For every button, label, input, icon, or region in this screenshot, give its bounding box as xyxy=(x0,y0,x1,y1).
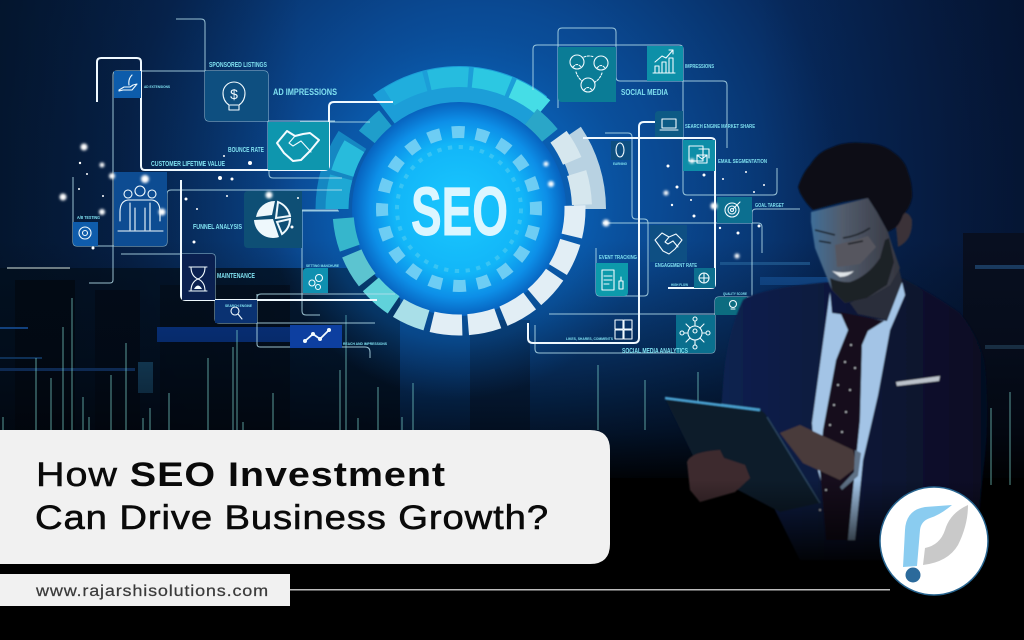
top arc xyxy=(277,27,641,391)
tile: earning xyxy=(611,141,631,160)
SEO glow halo xyxy=(269,19,649,399)
tile: event tracking xyxy=(596,263,628,296)
HUD labels: LIKES, SHARES, COMMENTS xyxy=(566,336,613,341)
tile: email segmentation xyxy=(683,140,715,171)
pocket square xyxy=(896,376,940,386)
ear xyxy=(895,213,912,247)
HUD labels: CUSTOMER LIFETIME VALUE xyxy=(151,161,225,168)
tie xyxy=(819,312,884,540)
HUD labels: ENGAGEMENT RATE xyxy=(655,263,698,269)
left arc xyxy=(295,45,623,373)
HUD labels xyxy=(77,62,784,355)
right arc xyxy=(277,27,641,391)
icon: likes shares comments xyxy=(615,320,632,339)
inner dot ring xyxy=(397,147,521,271)
face xyxy=(811,198,900,303)
cheek xyxy=(835,236,876,267)
tile: search engine market share xyxy=(655,111,683,137)
website bar: www.rajarshisolutions.com xyxy=(35,583,269,600)
shirt cuff xyxy=(840,450,861,490)
tile: search engine xyxy=(215,300,257,323)
HUD labels: MAINTENANCE xyxy=(217,273,255,280)
smile xyxy=(832,271,854,277)
star particles xyxy=(60,144,765,258)
tile: web xyxy=(694,268,715,288)
HUD labels: QUALITY SCORE xyxy=(723,291,747,296)
hair xyxy=(798,143,912,232)
dial core xyxy=(352,102,566,316)
SEO text: SEO xyxy=(411,173,508,250)
left connector lines xyxy=(73,19,395,358)
HUD labels: SOCIAL MEDIA ANALYTICS xyxy=(622,348,688,355)
shirt xyxy=(812,282,905,540)
HUD labels: EARNING xyxy=(613,162,627,166)
SEO dial xyxy=(277,27,641,391)
HUD labels: GOAL TARGET xyxy=(755,203,784,209)
tile: setting manchure xyxy=(303,268,328,293)
HUD labels: EVENT TRACKING xyxy=(599,255,637,261)
right connector lines xyxy=(528,28,800,353)
title line one: How SEO Investment xyxy=(36,456,446,494)
tile: customer group xyxy=(114,172,167,246)
tile: social media xyxy=(558,47,616,102)
HUD labels: A/B TESTING xyxy=(77,215,100,220)
tile: funnel analysis pie xyxy=(244,191,302,248)
title line two: Can Drive Business Growth? xyxy=(35,499,549,537)
suit jacket xyxy=(720,278,987,560)
HUD labels: SETTING MANCHURE xyxy=(306,263,339,268)
vertical light lines xyxy=(3,298,1010,485)
tile: impressions xyxy=(647,46,683,81)
logo xyxy=(880,487,988,595)
HUD labels: SOCIAL MEDIA xyxy=(621,87,668,97)
HUD labels: EMAIL SEGMENTATION xyxy=(718,159,767,165)
inner square ring xyxy=(376,126,542,292)
HUD labels: HIGH FLOW xyxy=(671,282,688,287)
HUD labels: IMPRESSIONS xyxy=(685,64,715,70)
man bottom fade xyxy=(660,480,1024,570)
neck xyxy=(850,268,902,320)
website bar xyxy=(0,574,290,606)
bottom fade xyxy=(0,240,1024,480)
HUD labels: BOUNCE RATE xyxy=(228,147,264,154)
tile: sponsored listings xyxy=(205,71,268,121)
tile: handshake xyxy=(268,122,329,170)
tile: maintenance hourglass xyxy=(182,254,215,300)
HUD labels: FUNNEL ANALYSIS xyxy=(193,222,242,231)
city skyline xyxy=(0,233,1024,475)
tile: ad extensions xyxy=(114,71,141,98)
tile: social media analytics xyxy=(676,315,715,353)
left hand xyxy=(687,450,750,502)
beard xyxy=(830,238,894,303)
tile: reach line chart xyxy=(290,325,342,348)
HUD labels: SEARCH ENGINE MARKET SHARE xyxy=(685,124,755,130)
man xyxy=(665,143,987,560)
divider line xyxy=(290,589,890,590)
tile: engagement rate xyxy=(650,225,687,262)
HUD labels: AD EXTENSIONS xyxy=(144,84,170,89)
tile: quality score xyxy=(715,297,747,315)
HUD labels: AD IMPRESSIONS xyxy=(273,87,337,98)
outer segmented ring xyxy=(296,46,622,372)
tile: goal target xyxy=(717,197,752,223)
title panel xyxy=(0,430,610,564)
HUD labels: SEARCH ENGINE xyxy=(225,303,252,308)
tablet xyxy=(665,398,820,512)
tile: sponsored listings: $ xyxy=(230,86,238,102)
tile: a/b testing xyxy=(73,222,98,246)
HUD labels: SPONSORED LISTINGS xyxy=(209,62,267,69)
brows and eyes xyxy=(815,228,870,244)
HUD labels: REACH AND IMPRESSIONS xyxy=(343,341,387,346)
right hand xyxy=(780,425,857,480)
